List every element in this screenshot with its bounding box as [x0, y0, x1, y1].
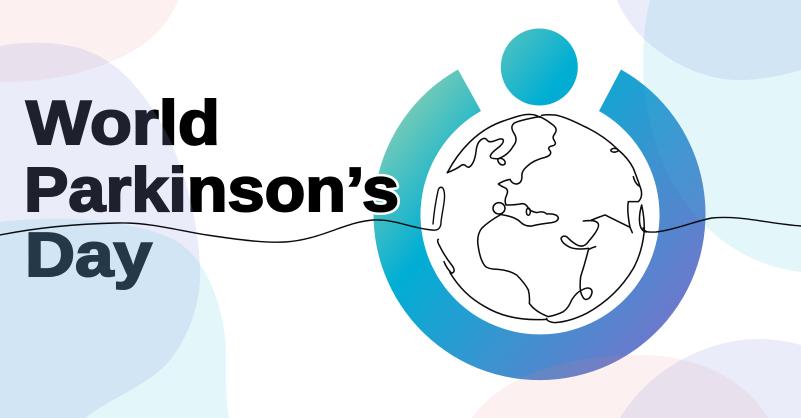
- continent: europe: [498, 117, 558, 226]
- asia coast: [592, 215, 632, 233]
- continent: greenland and scandinavia: [447, 117, 540, 173]
- asia small inlet: [633, 177, 639, 186]
- mediterranean island: [526, 208, 530, 215]
- globe line drawing: [438, 114, 647, 323]
- left coast hook: [438, 239, 454, 273]
- title: World: [26, 89, 220, 158]
- logo head circle: [501, 28, 578, 106]
- title: Parkinson’s: [24, 156, 399, 225]
- title: Day: [25, 221, 153, 290]
- title: Parkinson’s: [24, 156, 399, 225]
- globe lower right arc: [547, 205, 647, 323]
- logo ring: [374, 70, 706, 380]
- title: [24, 89, 399, 290]
- globe lower left arc: [450, 273, 547, 320]
- gibraltar loop: [493, 203, 505, 214]
- globe upper right arc: [542, 115, 642, 227]
- continent: africa: [478, 215, 596, 317]
- wave line: [0, 187, 801, 242]
- globe upper left arc: [447, 114, 540, 173]
- red sea and arabia: [561, 221, 599, 249]
